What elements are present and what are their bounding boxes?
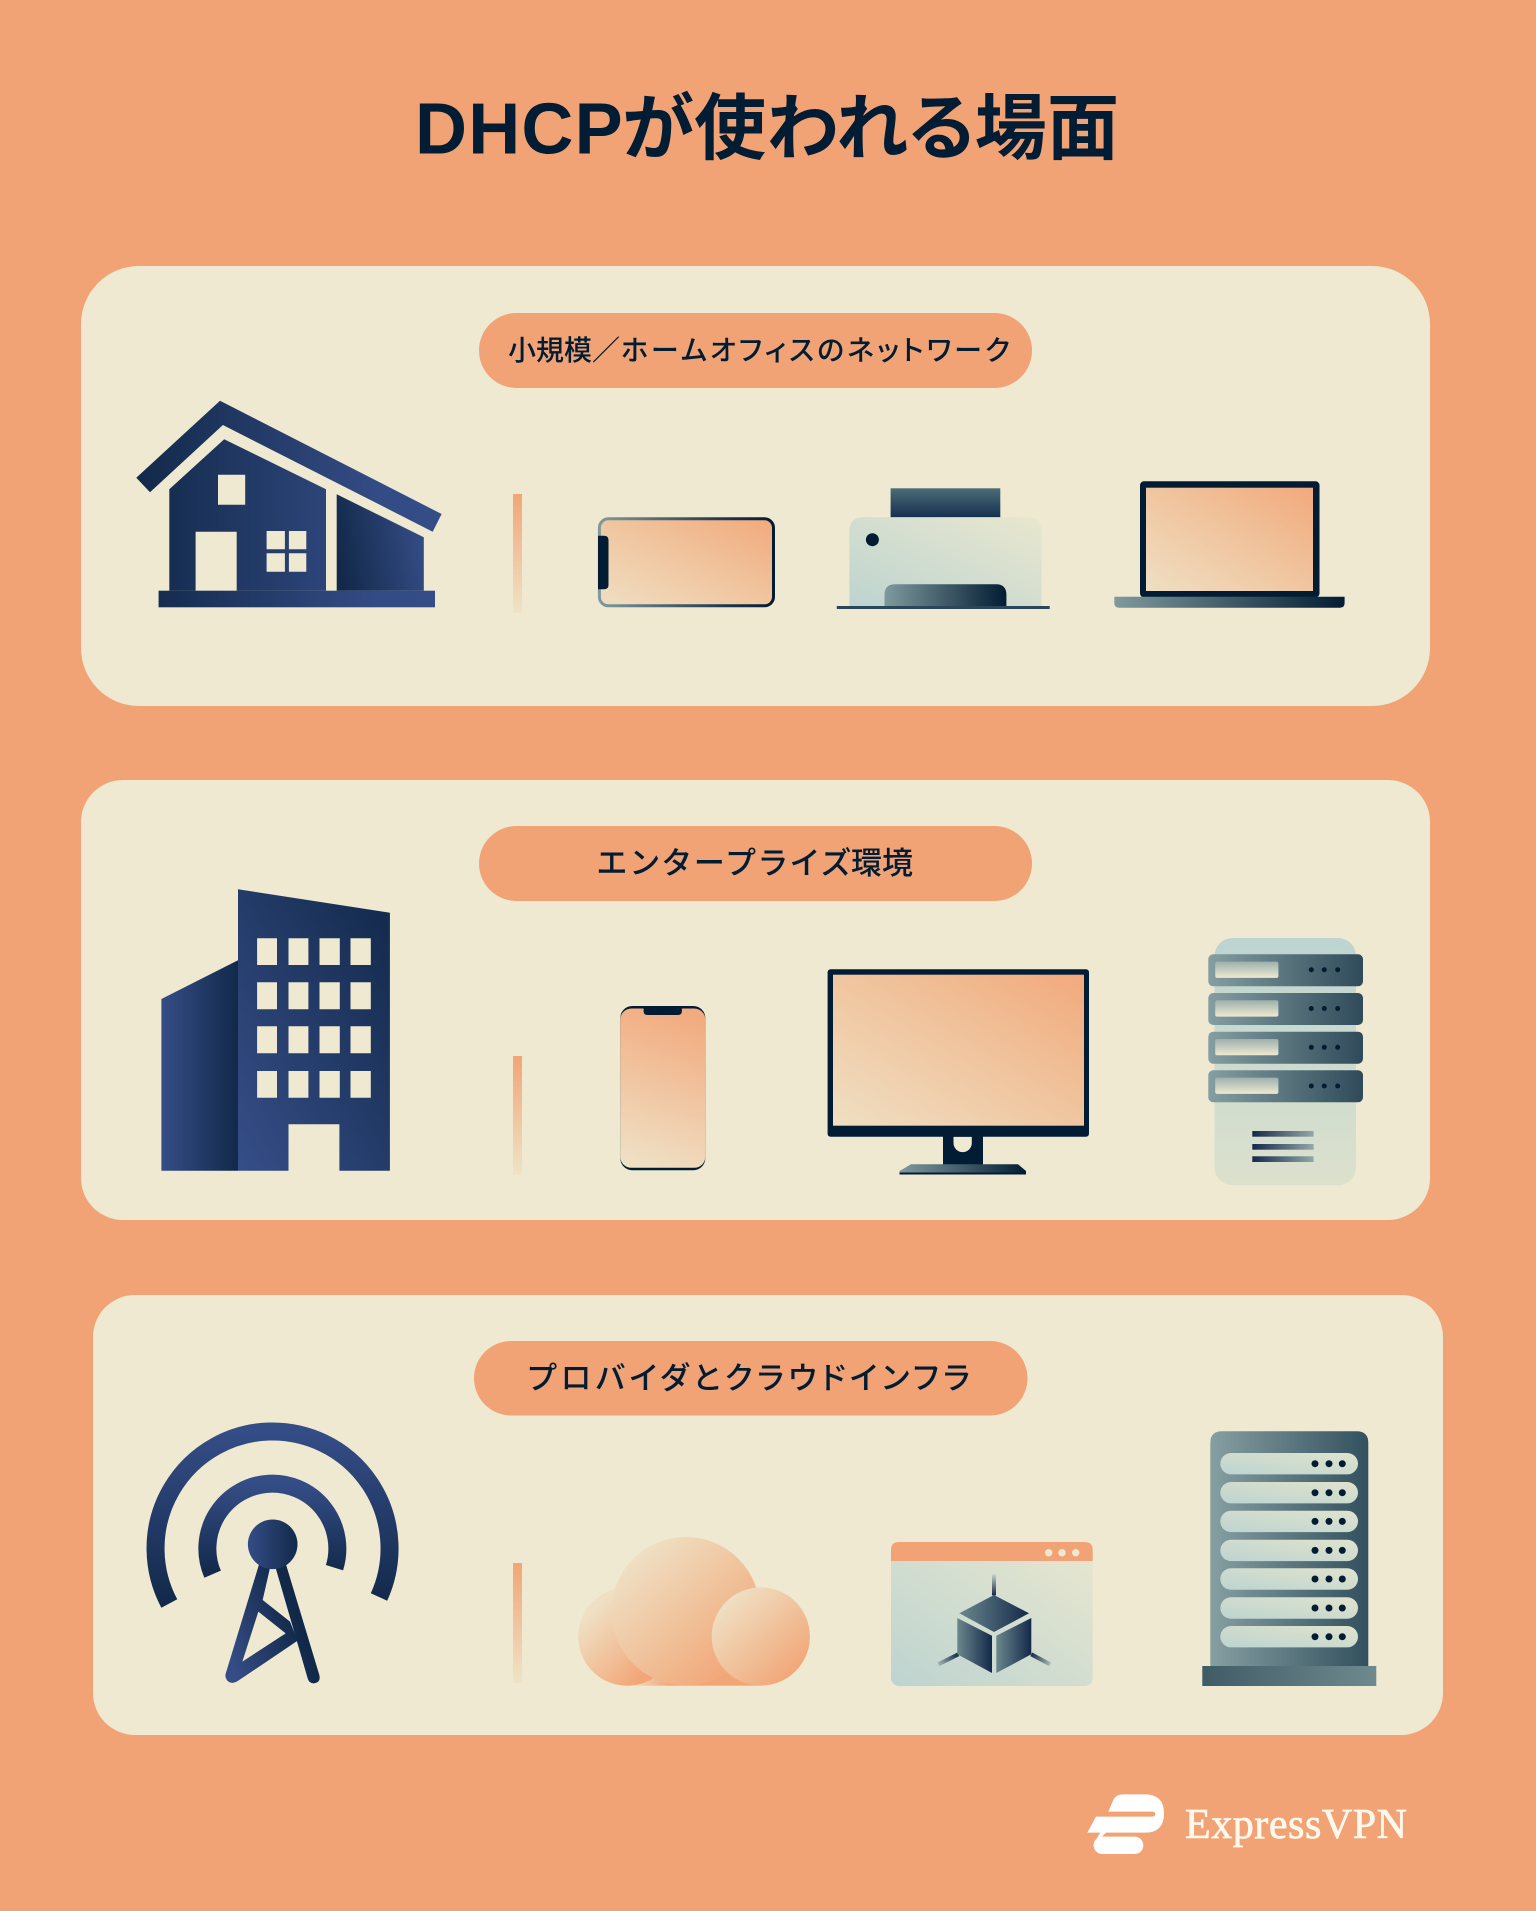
server unit 2 bbox=[1208, 993, 1363, 1025]
panel: small / home office network bbox=[81, 266, 1430, 706]
heading pill: small office: ホームオフィスのネットワーク bbox=[621, 335, 1010, 366]
logo: ExpressVPN bbox=[1087, 1794, 1407, 1854]
icon: landscape phone bbox=[598, 519, 774, 606]
icon: house bbox=[136, 401, 442, 607]
icon: broadcast tower bbox=[156, 1431, 390, 1683]
divider bbox=[513, 494, 522, 613]
divider bbox=[513, 1056, 522, 1175]
heading pill: providers: プロバイダとクラウドインフラ bbox=[528, 1361, 970, 1396]
panel: enterprise environment bbox=[81, 780, 1430, 1220]
heading pill: small office bbox=[479, 313, 1032, 388]
tower legs bbox=[225, 1563, 320, 1683]
panel: providers and cloud infrastructure bbox=[93, 1295, 1443, 1735]
icon: printer bbox=[837, 488, 1050, 609]
heading pill: enterprise: 環境 bbox=[851, 846, 913, 881]
title: DHCP bbox=[415, 89, 624, 169]
icon: portrait phone bbox=[620, 1006, 705, 1170]
heading pill: enterprise: エンタープライズ bbox=[597, 846, 850, 881]
server unit 4 bbox=[1208, 1070, 1363, 1102]
icon: browser window with cube bbox=[891, 1542, 1093, 1686]
icon: desktop monitor bbox=[828, 969, 1089, 1174]
icon: server rack bbox=[1202, 1431, 1376, 1686]
heading pill: small office: 小規模／ bbox=[508, 335, 620, 366]
server unit 3 bbox=[1208, 1032, 1363, 1064]
title: が使われる場面 bbox=[622, 89, 1119, 169]
icon: server tower bbox=[1208, 938, 1363, 1185]
server unit 1 bbox=[1208, 954, 1363, 986]
icon: laptop bbox=[1114, 481, 1345, 608]
logo wordmark: ExpressVPN bbox=[1185, 1802, 1407, 1848]
icon: office building bbox=[161, 889, 390, 1171]
heading pill: enterprise bbox=[479, 826, 1032, 901]
divider bbox=[513, 1563, 522, 1683]
vent lines bbox=[1252, 1131, 1314, 1162]
logo mark bbox=[1087, 1794, 1164, 1854]
icon: cloud bbox=[578, 1537, 810, 1686]
heading pill: providers bbox=[474, 1341, 1028, 1416]
